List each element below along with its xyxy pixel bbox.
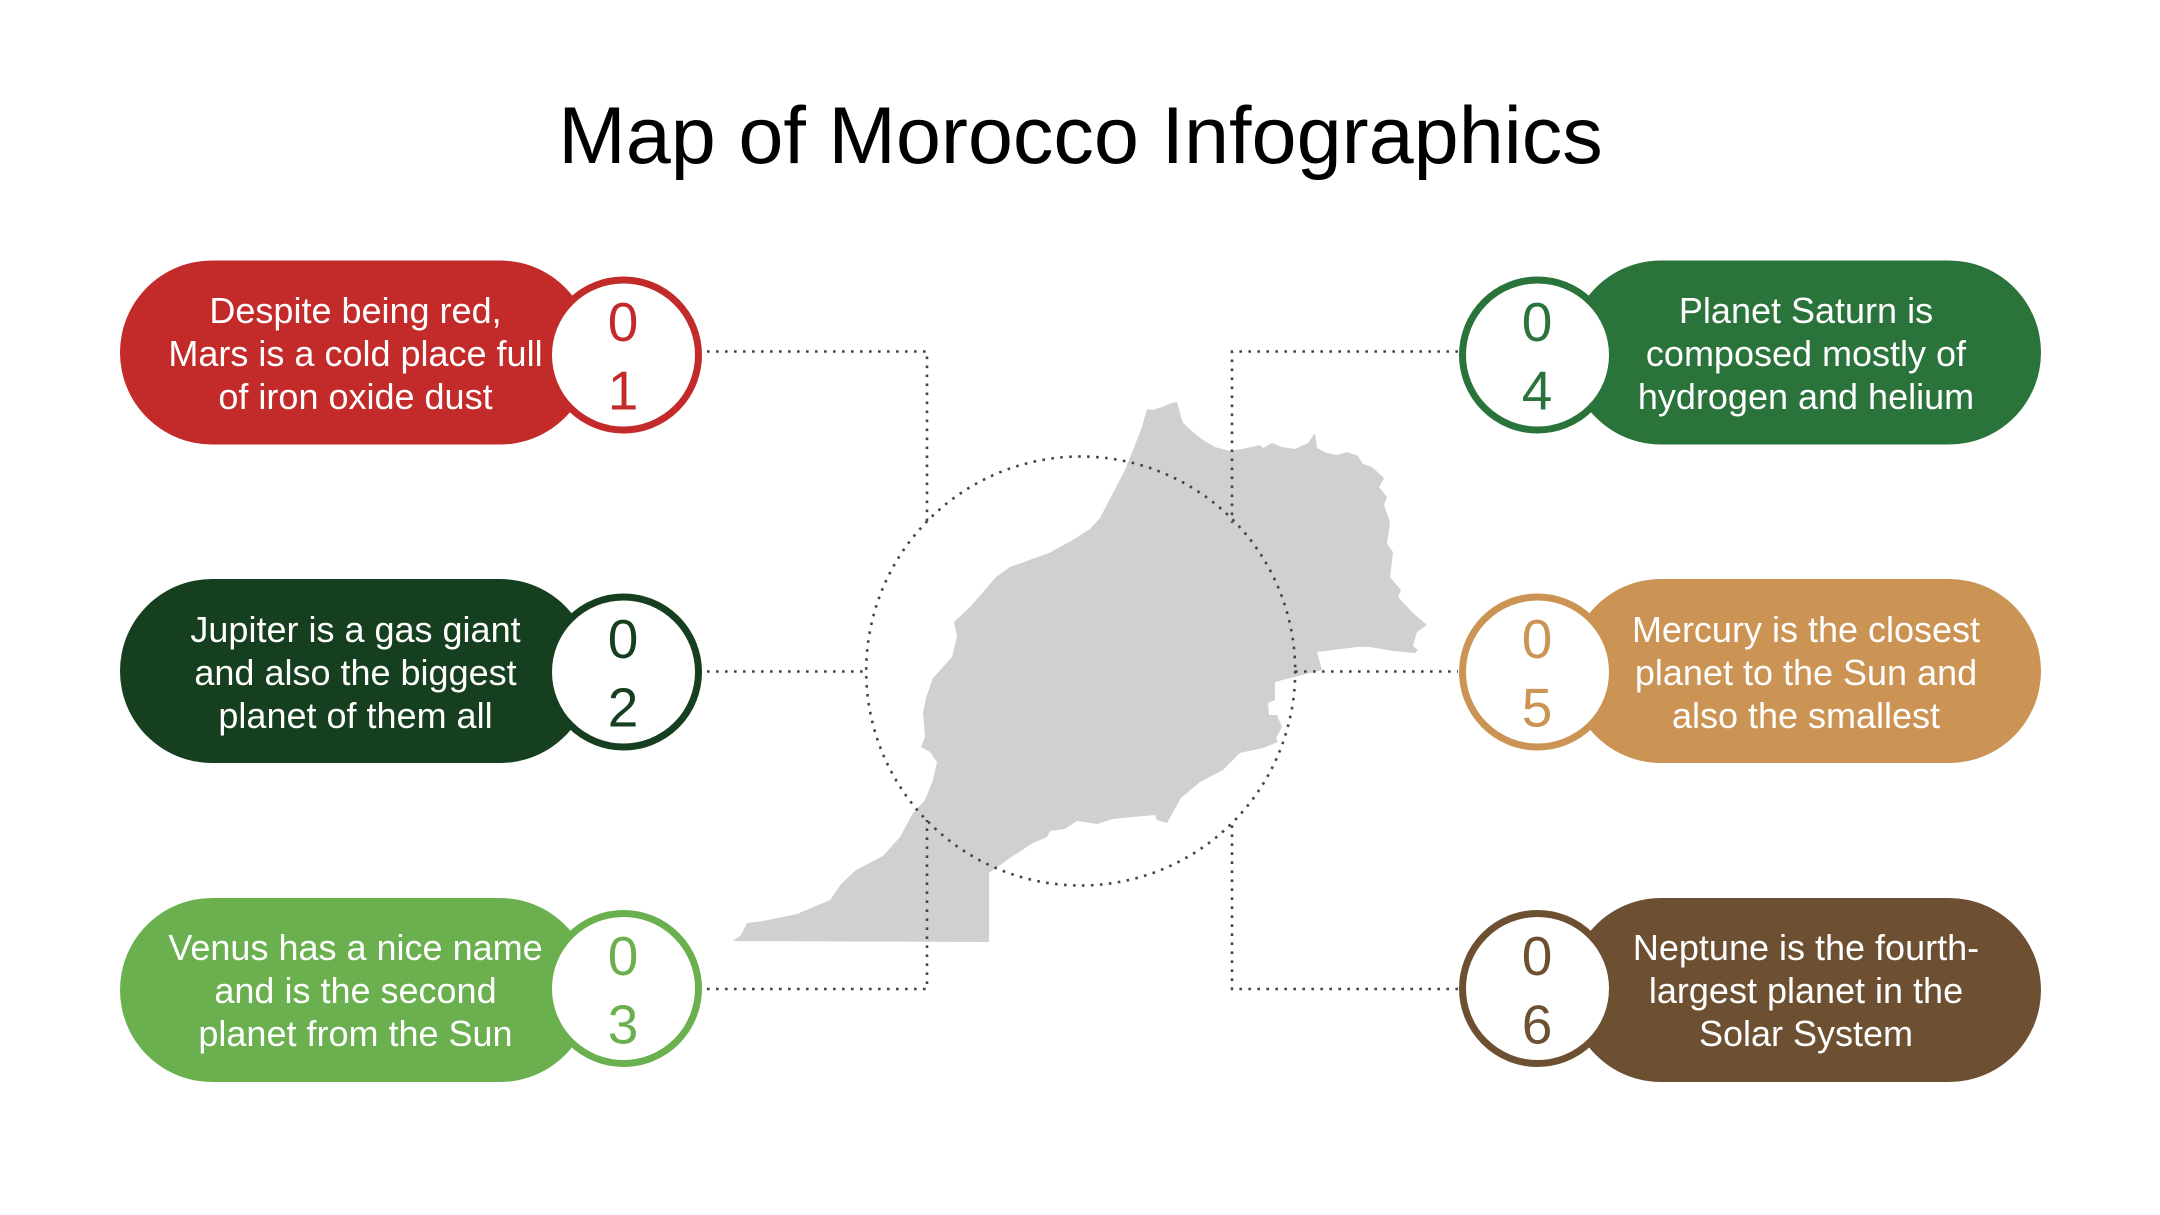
panel: item 05 [1462,579,2041,763]
panel: item 05: Mercury is the closest [1632,609,1980,650]
panel: item 02: 0 [608,608,638,670]
panel: item 03: Venus has a nice name [168,927,543,968]
panel: item 06: Neptune is the fourth- [1633,927,1979,968]
title: Map of Morocco Infographics [558,91,1603,181]
panel: item 01: 1 [608,360,638,422]
panel: item 05: planet to the Sun and [1635,652,1977,693]
map of Morocco [733,402,1427,942]
panel: item 03 [120,898,698,1082]
panel: item 05: also the smallest [1672,695,1940,736]
panel: item 03: planet from the Sun [198,1013,513,1054]
panel: item 03: 3 [608,994,638,1056]
panel: item 05: 0 [1522,608,1552,670]
panel: item 04: hydrogen and helium [1638,376,1974,417]
panel: item 02: Jupiter is a gas giant [190,609,521,650]
panel: item 04: 4 [1522,360,1552,422]
panel: item 02 [120,579,698,763]
panel: item 06 [1462,898,2041,1082]
panel: item 02: and also the biggest [194,652,517,693]
panel: item 03: and is the second [214,970,497,1011]
panel: item 04: composed mostly of [1646,333,1967,374]
panel: item 01: 0 [608,291,638,353]
panel: item 04: 0 [1522,291,1552,353]
panel: item 01: Despite being red, [209,290,502,331]
panel: item 05: 5 [1522,676,1552,738]
panel: item 02: 2 [608,676,638,738]
panel: item 06: 6 [1522,994,1552,1056]
panel: item 04 [1462,260,2041,444]
panel: item 03: 0 [608,925,638,987]
panel: item 04: Planet Saturn is [1679,290,1933,331]
panel: item 01: Mars is a cold place full [168,333,543,374]
panel: item 01: of iron oxide dust [218,376,493,417]
panel: item 06: Solar System [1699,1013,1913,1054]
panel: item 06: 0 [1522,925,1552,987]
panel: item 06: largest planet in the [1649,970,1963,1011]
panel: item 01 [120,260,698,444]
dotted circle around map [866,456,1295,886]
panel: item 02: planet of them all [218,695,493,736]
connector lines [707,352,1458,989]
